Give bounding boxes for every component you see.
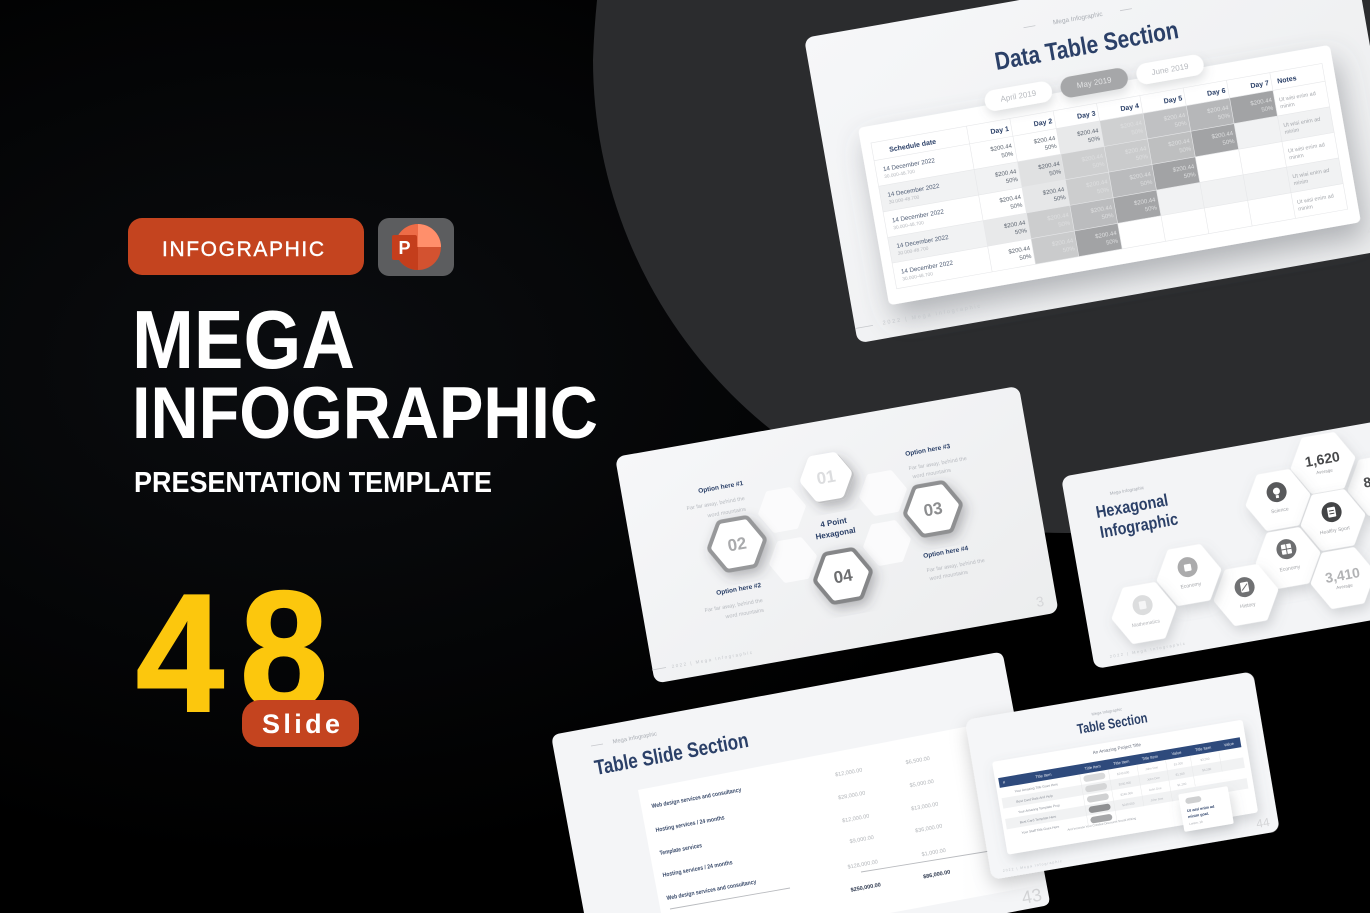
data table: 50%	[1136, 154, 1149, 162]
data table: 50%	[1097, 187, 1110, 195]
data table: Day 2	[1033, 118, 1053, 128]
data table: $240.000	[1120, 791, 1133, 797]
title: MEGA	[132, 293, 355, 386]
data table: 50%	[1222, 139, 1236, 147]
data table: John Doe	[1149, 786, 1162, 792]
hexagon 02	[711, 520, 763, 568]
data table: Day 4	[1120, 103, 1140, 113]
hexagon: 3,410: 3,410	[1324, 564, 1361, 586]
slide heading: Infographic	[1098, 510, 1179, 542]
row labels: Template services	[659, 843, 703, 857]
hexagon: Economy left: Economy	[1180, 581, 1202, 591]
data table: 50%	[1019, 254, 1033, 262]
data table: Best Card Template Here	[1020, 814, 1057, 825]
hexagon 02: 02	[726, 533, 748, 555]
option descriptions: word mountains	[724, 608, 765, 621]
hexagon: Science	[1245, 470, 1311, 530]
data table: $200.44	[1052, 238, 1075, 248]
data table: 50%	[1010, 203, 1024, 211]
option labels: Option here #4	[923, 545, 969, 560]
data table: Ut wisi enim ad	[1288, 142, 1325, 155]
data table: John Doe	[1145, 765, 1159, 771]
data table: 50%	[1145, 205, 1158, 213]
data table: $3.200	[1202, 767, 1212, 772]
option descriptions: word mountains	[911, 468, 952, 481]
month tabs: May 2019	[1076, 75, 1113, 90]
option descriptions: Far far away, behind the	[908, 456, 967, 472]
data table: $200.44	[1120, 121, 1143, 130]
values: $12,000.00	[842, 814, 870, 824]
data table: $200.44	[1168, 139, 1191, 148]
data table: John Doe	[1150, 796, 1164, 802]
icon: PowerPoint: P	[398, 238, 411, 258]
month tabs: April 2019	[1000, 89, 1037, 104]
faint background hexagons	[758, 471, 911, 582]
slide footer: 2022 | Mega Infographic	[882, 303, 982, 327]
hexagon: History	[1213, 565, 1279, 625]
data table: 30.000-48.700	[902, 271, 934, 283]
data table: Value	[1171, 750, 1183, 756]
row labels: Hosting services / 24 months	[655, 815, 726, 834]
values: $9,000.00	[849, 835, 874, 845]
table title: An Amazing Project Title	[1092, 742, 1142, 755]
hexagon 03: 03	[922, 498, 944, 520]
option descriptions: Far far away, behind the	[926, 558, 985, 574]
hexagon: Healthy Sport: Healthy Sport	[1319, 525, 1351, 536]
data table: Ut wisi enim ad	[1279, 91, 1316, 103]
data table: $200.44	[1042, 187, 1066, 197]
slide heading	[1094, 491, 1179, 542]
data table: $200.44	[1250, 98, 1273, 107]
data table: 50%	[1044, 144, 1058, 152]
slide count	[136, 556, 359, 747]
title	[132, 293, 598, 454]
slide footer: 2022 | Mega Infographic	[1109, 641, 1187, 659]
hexagon 04	[817, 552, 869, 600]
data table: 50%	[1261, 105, 1275, 114]
slide header: Mega Infographic	[1091, 706, 1122, 717]
row labels: Hosting services / 24 months	[662, 860, 734, 879]
data table: Title Item	[1141, 754, 1159, 761]
data table: 50%	[1062, 246, 1076, 254]
slide heading: Data Table Section	[993, 16, 1181, 76]
page number: 43	[1020, 885, 1043, 908]
panel: hexagonal infographic slide	[1061, 414, 1370, 669]
data table: 50%	[1092, 162, 1106, 170]
totals: $86,000.00	[923, 870, 951, 880]
data table: 30.000-48.700	[884, 169, 916, 180]
hexagon: Mathematics: Mathematics	[1131, 618, 1161, 629]
data table: $200.44	[1095, 231, 1118, 240]
data table: 50%	[1218, 113, 1231, 121]
data table: $200.44	[995, 169, 1018, 179]
data table: $200.44	[1163, 113, 1186, 123]
data table: $200.44	[1081, 154, 1104, 164]
badge: INFOGRAPHIC: INFOGRAPHIC	[162, 238, 324, 261]
data table: 50%	[1015, 228, 1028, 236]
data table: Title Item	[1035, 772, 1052, 779]
data table: 50%	[1101, 213, 1115, 221]
hexagon: Economy right: Economy	[1279, 564, 1301, 574]
hexagon: History: History	[1240, 601, 1257, 610]
slide heading: Table Section	[1076, 709, 1149, 737]
slide heading: Hexagonal	[1094, 491, 1170, 522]
data table: 50%	[1183, 172, 1197, 180]
slide footer: 2022 | Mega Infographic	[1002, 859, 1063, 873]
hexagon: 3,410: Average	[1336, 582, 1354, 590]
data table: $200.44	[1172, 164, 1196, 174]
month tabs	[983, 53, 1205, 112]
data table: #	[1002, 779, 1006, 785]
data table: $200.44	[999, 195, 1022, 204]
values: $6,500.00	[905, 756, 930, 766]
slide header: Mega Infographic	[1109, 485, 1145, 496]
data table: 14 December 2022	[896, 234, 950, 250]
data table: 14 December 2022	[882, 157, 936, 173]
data table: $240.000	[1118, 780, 1132, 787]
data table: $240.000	[1117, 770, 1130, 776]
data table: 50%	[1049, 169, 1062, 177]
data table: 50%	[1140, 180, 1154, 188]
data table: Ut wisi enim ad	[1292, 168, 1330, 180]
data table: minim	[1289, 153, 1305, 162]
values: $1,000.00	[921, 848, 946, 858]
option labels	[698, 443, 969, 597]
data table: minim	[1284, 127, 1300, 136]
center label: Hexagonal	[815, 526, 856, 541]
values: $13,000.00	[911, 802, 939, 812]
data table: 30.000-48.700	[897, 246, 929, 257]
hexagon: 1,620: Average	[1316, 467, 1334, 475]
panel: table section slide	[965, 671, 1280, 880]
hexagon 04: 04	[832, 565, 855, 587]
data table: minim	[1293, 179, 1309, 187]
data table: Title Item	[1113, 758, 1130, 766]
data table: minim	[1298, 204, 1314, 213]
data table: $200.44	[1008, 246, 1031, 256]
hexagon: 1,620	[1290, 433, 1356, 493]
popup card: Lorem: 19	[1189, 820, 1203, 826]
hexagon: 3,410	[1310, 548, 1370, 608]
data table: Your Staff Title Goes Here	[1021, 825, 1060, 835]
data table: Title Item	[1084, 763, 1102, 771]
option descriptions: Far far away, behind the	[686, 496, 745, 512]
data table: 50%	[1179, 146, 1192, 154]
data table: minim	[1280, 102, 1296, 110]
data table: Title Item	[1195, 745, 1212, 752]
data table: $200.44	[1077, 128, 1100, 138]
slide header: Mega Infographic	[612, 731, 658, 745]
page number: 44	[1255, 815, 1271, 831]
data table: Ut wisi enim ad	[1297, 193, 1334, 206]
data table	[871, 63, 1348, 289]
dark circle backdrop	[593, 0, 1370, 533]
data table: $200.44	[1125, 146, 1148, 156]
data table: $1.200	[1173, 761, 1183, 767]
data table: Notes	[1277, 75, 1297, 85]
title: INFOGRAPHIC	[132, 373, 598, 454]
data table: 30.000-48.700	[893, 220, 925, 231]
data table: Value	[1223, 741, 1235, 747]
data table: $3.200	[1200, 757, 1210, 762]
option labels: Option here #1	[698, 480, 744, 495]
data table: $240.000	[1122, 801, 1135, 807]
data table: 50%	[1174, 121, 1188, 129]
values: $5,000.00	[909, 779, 934, 789]
row labels: Web design services and consultancy	[666, 879, 757, 902]
data table: Best Card Rate And Help	[1016, 794, 1053, 804]
data table: $200.44	[1207, 105, 1230, 115]
data table: $200.44	[1211, 131, 1234, 141]
slide count: 4	[136, 559, 224, 747]
data table: Ut wisi enim ad	[1283, 117, 1321, 129]
option labels: Option here #3	[905, 443, 951, 458]
data table: $200.44	[1038, 161, 1061, 171]
data table: Day 3	[1077, 111, 1096, 121]
page number: 3	[1035, 593, 1045, 610]
data table: Day 1	[990, 126, 1010, 136]
data table: Schedule date	[889, 139, 937, 154]
data table: Day 6	[1207, 88, 1226, 98]
values	[835, 756, 946, 871]
option descriptions: Far far away, behind the	[704, 598, 763, 614]
data table: 50%	[1053, 195, 1067, 203]
data table: $200.44	[1047, 213, 1070, 222]
data table: 50%	[1058, 221, 1071, 229]
data table	[998, 737, 1250, 839]
totals: $250,000.00	[850, 882, 881, 894]
data table: $200.44	[990, 143, 1013, 153]
hexagon: Economy right	[1255, 528, 1321, 588]
data table: $200.44	[1033, 136, 1056, 146]
table note: And Increase Your Creative Discounts Social Writing	[1067, 816, 1137, 832]
data table: 50%	[1001, 151, 1015, 159]
popup card: minim goal.	[1188, 812, 1209, 819]
data table: $200.44	[1134, 197, 1157, 207]
data table: $200.44	[1090, 205, 1113, 215]
center label	[815, 516, 856, 541]
data table: Your Amazing Title Goes Here	[1014, 782, 1059, 793]
panel: 4 point hexagonal slide	[615, 386, 1059, 684]
data table: Day 7	[1250, 80, 1270, 90]
hexagon: Healthy Sport	[1300, 490, 1366, 550]
row labels	[651, 787, 757, 902]
slide count: 8	[240, 556, 328, 744]
data table: 14 December 2022	[901, 260, 954, 276]
data table: $200.44	[1086, 179, 1109, 189]
hexagon 03	[907, 485, 959, 533]
option descriptions: word mountains	[928, 570, 969, 583]
values: $128,000.00	[847, 859, 878, 871]
data table: Day 5	[1163, 95, 1183, 105]
option labels: Option here #2	[716, 582, 762, 597]
values: $12,000.00	[835, 768, 863, 778]
hexagon: partial	[1347, 455, 1370, 515]
values: $28,000.00	[838, 791, 866, 801]
slide header: Mega Infographic	[1052, 11, 1104, 26]
data table: $1.200	[1175, 771, 1185, 777]
data table: 50%	[1006, 177, 1019, 185]
hexagon: Economy left	[1156, 545, 1222, 605]
center label: 4 Point	[820, 516, 848, 529]
hexagon 01: 01	[815, 466, 837, 488]
table card	[858, 45, 1361, 305]
values: $36,000.00	[915, 824, 943, 834]
hexagon: 1,620: 1,620	[1304, 448, 1341, 470]
slide count: Slide	[262, 709, 340, 739]
slide heading: Table Slide Section	[593, 729, 750, 780]
data table: Your Amazing Template Prop	[1018, 803, 1060, 814]
data table: 30.000-48.700	[888, 194, 920, 206]
data table: $200.44	[1129, 172, 1152, 182]
data table: $200.44	[1004, 220, 1027, 230]
data table: 50%	[1131, 128, 1145, 137]
panel: data table slide	[804, 0, 1370, 343]
data table: John Doe	[1147, 776, 1160, 782]
data table: 14 December 2022	[887, 183, 941, 199]
option descriptions	[686, 456, 985, 621]
data table: $1.200	[1177, 782, 1187, 787]
panel: table slide section	[552, 653, 1049, 913]
data table: 14 December 2022	[892, 208, 945, 224]
data table: 50%	[1088, 136, 1101, 144]
month tabs: June 2019	[1151, 62, 1190, 77]
hexagon: Science: Science	[1271, 506, 1289, 515]
totals	[850, 870, 951, 894]
badge: INFOGRAPHIC	[128, 218, 364, 275]
table card	[638, 717, 1046, 913]
hexagon: Mathematics	[1111, 583, 1177, 643]
popup card	[1178, 786, 1234, 832]
data table: 50%	[1106, 238, 1119, 247]
subtitle: PRESENTATION TEMPLATE	[134, 467, 492, 499]
icon: PowerPoint	[378, 218, 454, 276]
table card	[992, 720, 1258, 855]
row labels: Web design services and consultancy	[651, 787, 742, 810]
popup card: Ut wisi enim ad	[1187, 804, 1215, 813]
option descriptions: word mountains	[706, 507, 747, 520]
slide footer: 2022 | Mega Infographic	[671, 650, 754, 669]
hexagon 01	[803, 456, 851, 499]
